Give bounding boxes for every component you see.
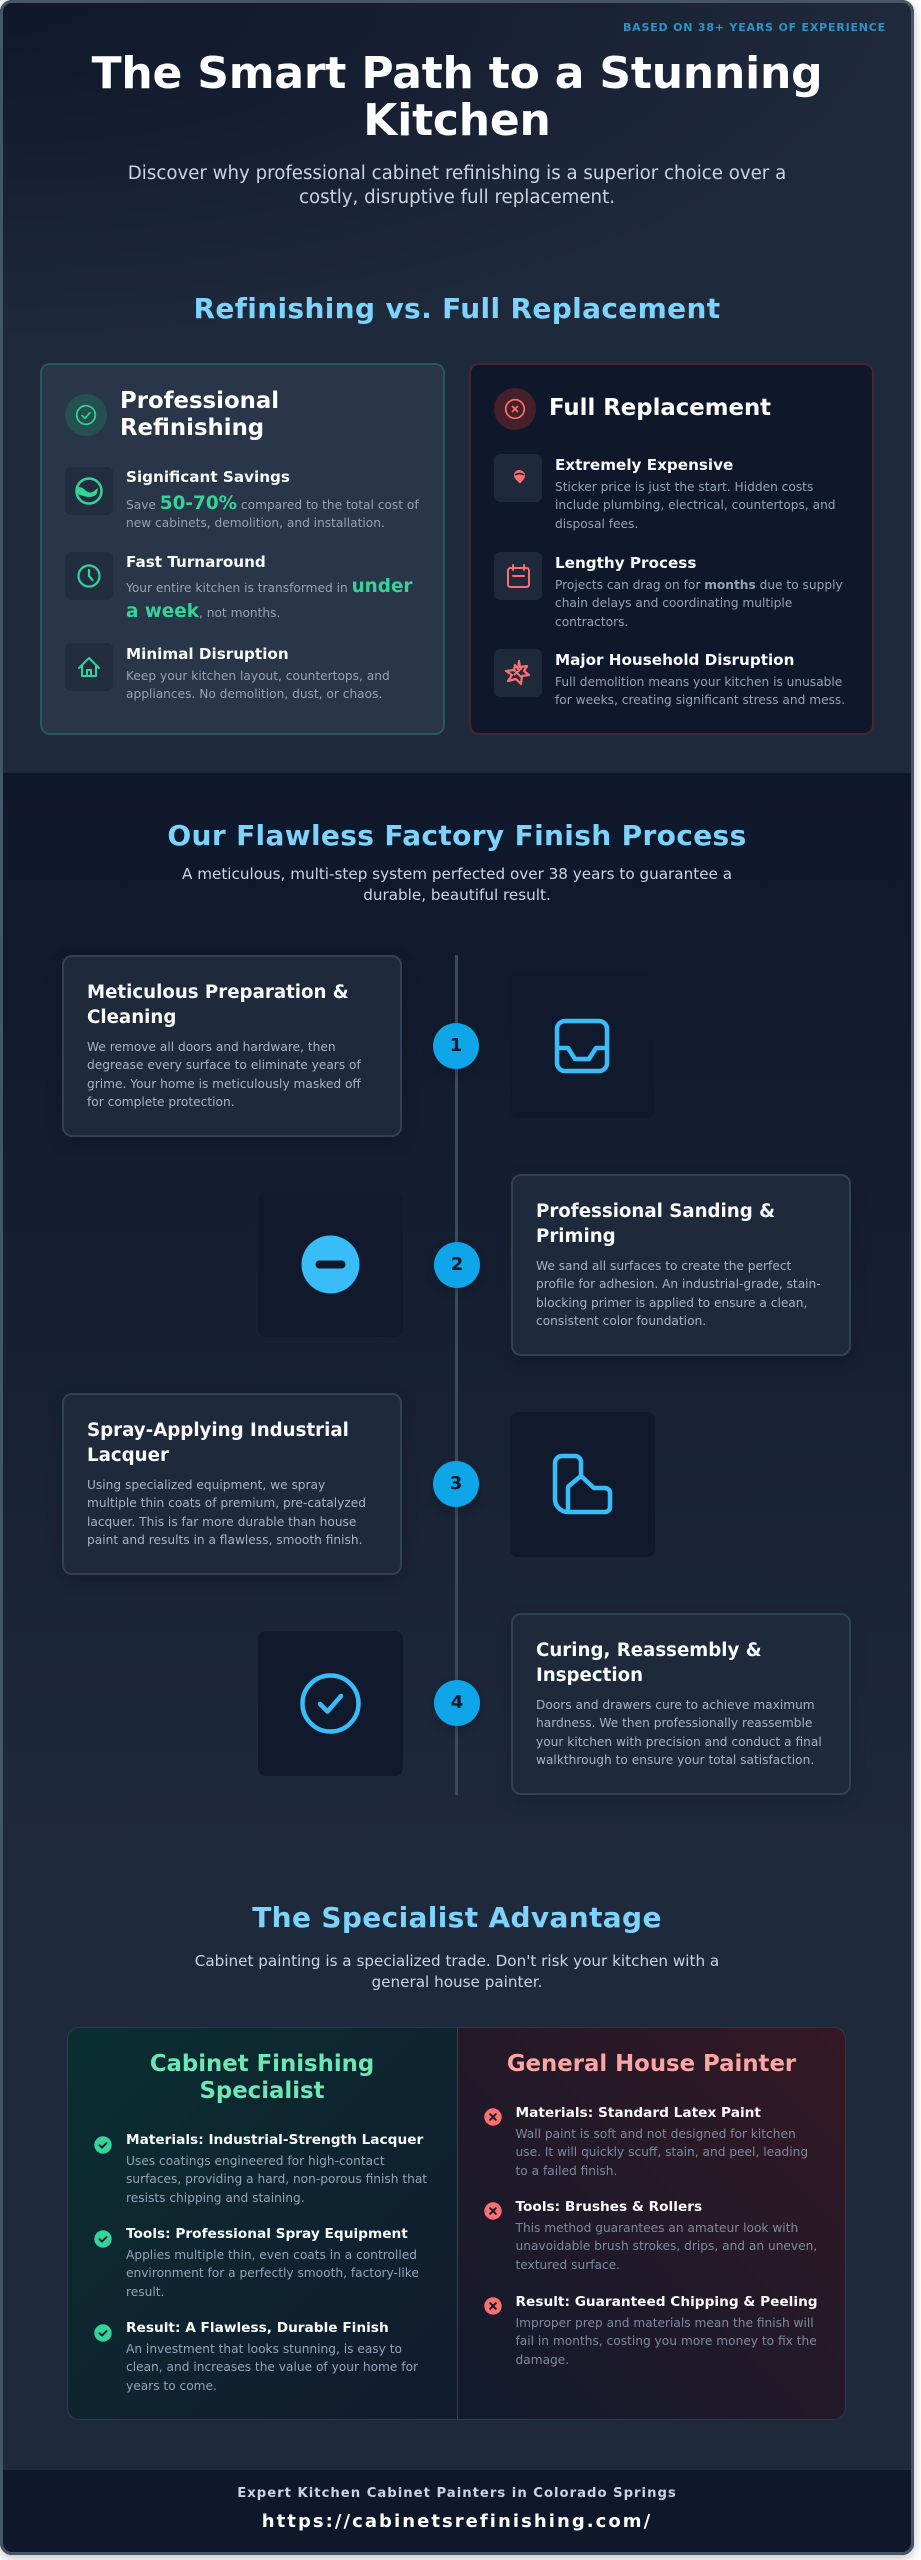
step text: profile for adhesion. An industrial-grade, stain- [536,1277,821,1291]
feature text [126,576,412,622]
feature: expensive [494,454,836,531]
step text: multiple thin coats of premium, pre-catalyzed [87,1496,366,1510]
step 1 [62,955,610,1137]
icon: price [494,454,542,502]
feature: turnaround [65,552,412,622]
item text: textured surface. [516,2258,620,2272]
item text [126,2248,419,2298]
step card [511,1174,851,1356]
step title: Professional Sanding & [536,1201,775,1222]
item title: Result: A Flawless, Durable Finish [126,2320,389,2336]
feature text: Save 50-70% compared to the total cost of [126,493,419,514]
timeline line [455,955,458,1795]
step title [536,1201,775,1246]
panel: comparison [67,2027,846,2420]
item text: use. It will quickly scuff, stain, and peel, leading [516,2145,808,2159]
panel: process section [0,773,914,1850]
icon: cross [484,2297,502,2315]
step number [433,1461,479,1507]
heading: specialist: The Specialist Advantage [252,1901,662,1934]
feature: household disruption [494,649,845,707]
item title: Result: Guaranteed Chipping & Peeling [516,2294,818,2310]
step text [536,1698,822,1767]
card heading [120,388,279,441]
item title: Tools: Brushes & Rollers [516,2199,702,2215]
step text: Doors and drawers cure to achieve maximum [536,1698,815,1712]
item text: This method guarantees an amateur look with [516,2221,798,2235]
feature: lengthy [494,552,843,629]
icon: check circle badge [65,394,107,436]
item: materials [94,2132,427,2204]
item text: result. [126,2284,164,2298]
item: tools [94,2226,419,2298]
specialist intro: general house painter. [372,1973,542,1991]
footer tagline: Expert Kitchen Cabinet Painters in Colorado Springs [237,2486,677,2501]
icon box: tray [510,973,655,1118]
subtitle [128,163,786,208]
step card [62,1393,402,1575]
feature text: Sticker price is just the start. Hidden costs [555,480,813,494]
item text [126,2154,427,2204]
experience tag: BASED ON 38+ YEARS OF EXPERIENCE [623,21,886,34]
icon: check [94,2324,112,2342]
step title [87,982,349,1028]
icon: check [94,2136,112,2154]
step title [87,1420,349,1466]
subtitle: Discover why professional cabinet refinishing is a superior choice over a [128,163,786,184]
step number [434,1680,480,1726]
step number: 4 [451,1692,463,1713]
column heading [150,2051,374,2104]
item text: fail in months, costing you more money to fix the [516,2334,817,2348]
feature: savings [65,467,419,530]
step text: lacquer. This is far more durable than house [87,1514,356,1528]
panel: professional refinishing [40,363,445,735]
footer [0,2469,914,2555]
item text [516,2219,817,2274]
icon box: hand [510,1412,655,1557]
icon: cross [484,2108,502,2126]
panel: full replacement [469,363,874,735]
icon: calendar [494,552,542,600]
item title: Materials: Industrial-Strength Lacquer [126,2132,423,2148]
card heading: Professional [120,388,279,414]
feature heading: Significant Savings [126,468,290,486]
item text: Wall paint is soft and not designed for kitchen [516,2127,796,2141]
item text: environment for a perfectly smooth, factory-like [126,2266,419,2280]
step title: Inspection [536,1664,643,1686]
column heading: Specialist [199,2078,324,2104]
title [92,48,822,146]
item: result [94,2320,418,2392]
feature heading: Extremely Expensive [555,456,733,474]
feature: disruption [65,643,390,701]
column: specialist [68,2028,457,2421]
feature text: Projects can drag on for months due to supply [555,578,843,592]
step 2 [302,1174,851,1356]
item: materials [458,2104,845,2184]
step title: Spray-Applying Industrial [87,1420,349,1441]
step text: consistent color foundation. [536,1314,706,1328]
step card [511,1613,851,1795]
step number: 2 [451,1254,463,1275]
step title: Lacquer [87,1444,169,1466]
step title: Meticulous Preparation & [87,982,349,1003]
feature text: a week, not months. [126,601,280,622]
footer url: https://cabinetsrefinishing.com/ [262,2511,652,2532]
heading: refinishing vs replacement: Refinishing vs. Full Replacement [193,292,721,325]
step text: hardness. We then professionally reassemble [536,1716,812,1730]
icon: cross [484,2202,502,2220]
feature text: Keep your kitchen layout, countertops, and [126,669,390,683]
feature text: for weeks, creating significant stress and mess. [555,693,845,707]
step text [87,1040,361,1109]
card heading: Refinishing [120,415,264,441]
step text: for complete protection. [87,1095,235,1109]
icon: clock [65,552,113,600]
step text: walkthrough to ensure your total satisfaction. [536,1753,814,1767]
item text: An investment that looks stunning, is easy to [126,2342,402,2356]
feature text: chain delays and coordinating multiple [555,596,792,610]
step number [434,1242,480,1288]
feature text: new cabinets, demolition, and installation. [126,516,385,530]
title: Kitchen [363,95,551,146]
item: result [458,2293,845,2373]
step text: We remove all doors and hardware, then [87,1040,336,1054]
item text: unavoidable brush strokes, drips, and an uneven, [516,2239,817,2253]
feature text [126,493,419,530]
step text [87,1478,366,1547]
step text: We sand all surfaces to create the perfect [536,1259,791,1273]
item text: resists chipping and staining. [126,2190,305,2204]
item: tools [458,2198,845,2278]
step text: grime. Your home is meticulously masked off [87,1076,361,1090]
column: house painter [457,2028,846,2421]
item text: Applies multiple thin, even coats in a controlled [126,2248,417,2262]
step 4 [258,1613,851,1796]
item text: years to come. [126,2378,217,2392]
specialist intro [195,1952,719,1991]
item text: Improper prep and materials mean the finish will [516,2316,814,2330]
feature text [126,669,390,701]
icon box: check circle [258,1631,403,1776]
icon: x circle badge [494,388,536,430]
step card [62,955,402,1137]
step text [536,1259,821,1328]
feature heading: Lengthy Process [555,554,696,572]
feature heading: Major Household Disruption [555,651,794,669]
feature text [555,675,845,707]
feature text: include plumbing, electrical, countertops, and [555,498,836,512]
feature heading: Minimal Disruption [126,645,289,663]
step 3 [62,1393,655,1575]
step text: blocking primer is applied to ensure a clean, [536,1296,807,1310]
step title: Curing, Reassembly & [536,1640,762,1661]
process intro: A meticulous, multi-step system perfected over 38 years to guarantee a [182,865,732,883]
item text: Uses coatings engineered for high-contact [126,2154,385,2168]
process intro: durable, beautiful result. [363,886,551,904]
icon box: minus circle [258,1192,403,1337]
feature text [555,578,843,629]
item text [126,2340,418,2395]
feature text: disposal fees. [555,517,638,531]
feature heading: Fast Turnaround [126,553,266,571]
icon: house [65,643,113,691]
column heading: Cabinet Finishing [150,2051,374,2077]
step text: degrease every surface to eliminate years of [87,1058,361,1072]
item title: Materials: Standard Latex Paint [516,2105,761,2121]
column heading: General House Painter [507,2051,796,2077]
step number [433,1023,479,1069]
item title: Tools: Professional Spray Equipment [126,2226,408,2242]
feature text [555,480,836,531]
step text: your kitchen with precision and conduct a final [536,1734,822,1748]
step text: paint and results in a flawless, smooth finish. [87,1533,362,1547]
icon: check [94,2230,112,2248]
item text: to a failed finish. [516,2164,617,2178]
step text: Using specialized equipment, we spray [87,1478,325,1492]
feature text: contractors. [555,615,628,629]
card heading: Full Replacement [549,395,771,421]
feature text: appliances. No demolition, dust, or chaos. [126,687,382,701]
step number: 1 [450,1035,462,1056]
heading: process: Our Flawless Factory Finish Process [167,819,747,852]
step title [536,1640,762,1686]
subtitle: costly, disruptive full replacement. [299,187,615,208]
icon: burst [494,649,542,697]
feature text: Full demolition means your kitchen is unusable [555,675,842,689]
step title: Cleaning [87,1006,176,1028]
item text [516,2314,817,2369]
item text: clean, and increases the value of your home for [126,2360,418,2374]
title: The Smart Path to a Stunning [92,48,822,99]
process intro [182,865,732,904]
step number: 3 [450,1473,462,1494]
item text: surfaces, providing a hard, non-porous finish that [126,2172,427,2186]
specialist intro: Cabinet painting is a specialized trade. Don't risk your kitchen with a [195,1952,719,1970]
item text [516,2125,808,2180]
icon: savings [65,467,113,515]
item text: damage. [516,2352,569,2366]
step title: Priming [536,1226,616,1246]
feature text: Your entire kitchen is transformed in under [126,576,412,597]
